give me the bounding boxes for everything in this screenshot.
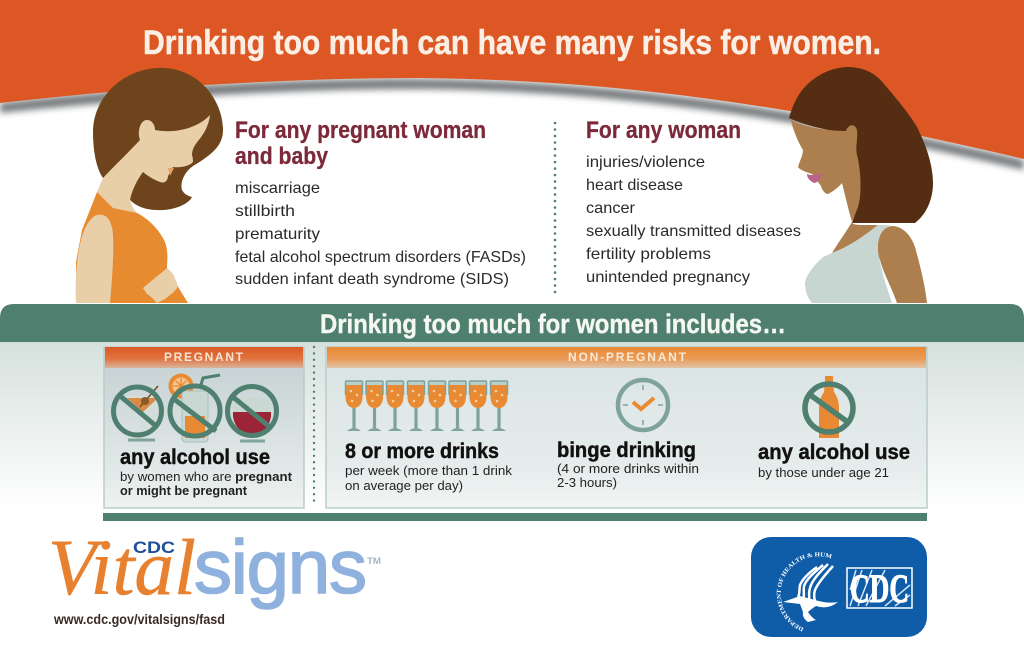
- CDC box: [847, 566, 912, 611]
- panel header: pregnant: PREGNANT: [164, 350, 244, 364]
- label: any alcohol use: by women who are pregnant: [120, 469, 293, 484]
- illustration: pregnant woman: [76, 68, 223, 303]
- label: 8 or more drinks: on average per day): [345, 478, 463, 493]
- label: binge drinking: [557, 438, 699, 490]
- heading: pregnant woman: For any pregnant woman: [235, 117, 486, 144]
- list: general risks: sexually transmitted diseases: [586, 223, 801, 240]
- panel header: pregnant: [105, 347, 303, 368]
- text block: pregnant woman risks: [235, 117, 526, 288]
- label: any alcohol use under 21: by those under age 21: [758, 465, 889, 480]
- label: 8 or more drinks: 8 or more drinks: [345, 439, 499, 463]
- icon: no martini: [114, 386, 163, 440]
- orange banner: [0, 0, 1024, 159]
- url: www.cdc.gov/vitalsigns/fasd: [53, 612, 225, 627]
- list: pregnancy risks: fetal alcohol spectrum disorders (FASDs): [235, 249, 526, 266]
- HHS seal: [776, 552, 838, 632]
- list: general risks: injuries/violence: [586, 154, 705, 171]
- heading: pregnant woman: [235, 117, 486, 170]
- list: pregnancy risks: stillbirth: [235, 203, 295, 220]
- page background gradient: [0, 342, 1024, 512]
- logo: CDC Vital Signs: CDC: [133, 538, 175, 557]
- logo: CDC Vital Signs: Vital: [48, 525, 196, 612]
- panel: non-pregnant: [326, 347, 927, 508]
- list: pregnancy risks: miscarriage: [235, 180, 320, 197]
- CDC box: CDC: [850, 566, 909, 611]
- label: binge drinking: 2-3 hours): [557, 475, 617, 490]
- label: any alcohol use under 21: [758, 440, 910, 480]
- label: any alcohol use: any alcohol use: [120, 445, 270, 469]
- green section band: [0, 304, 1024, 342]
- logo: CDC Vital Signs: signs: [194, 525, 367, 610]
- list: general risks: unintended pregnancy: [586, 269, 750, 286]
- text block: any woman risks: [586, 117, 801, 286]
- heading: pregnant woman: and baby: [235, 143, 328, 170]
- heading: any woman: For any woman: [586, 117, 741, 144]
- icon: eight glasses: [346, 381, 508, 431]
- list: general risks: cancer: [586, 200, 636, 217]
- icon: no wine: [228, 386, 276, 441]
- title: Drinking too much can have many risks for women.: [143, 24, 881, 62]
- panel header: non-pregnant: [327, 347, 926, 368]
- panel header: non-pregnant: NON-PREGNANT: [568, 350, 687, 364]
- icon: no mixed drink: [168, 374, 220, 442]
- list: pregnancy risks: prematurity: [235, 226, 320, 243]
- icon: clock: [618, 380, 668, 430]
- label: 8 or more drinks: per week (more than 1 drink: [345, 463, 513, 478]
- illustration: non-pregnant woman: [789, 67, 933, 303]
- list: pregnancy risks: [235, 180, 526, 288]
- label: any alcohol use under 21: any alcohol use: [758, 440, 910, 464]
- list: general risks: [586, 154, 801, 286]
- banner shadow: [0, 79, 1024, 170]
- list: general risks: fertility problems: [586, 246, 711, 263]
- label: binge drinking: (4 or more drinks within: [557, 461, 699, 476]
- icon: no bottle: [805, 376, 853, 438]
- list: general risks: heart disease: [586, 177, 683, 194]
- logo: CDC Vital Signs: TM: [367, 556, 381, 566]
- logo: CDC Vital Signs: [48, 525, 381, 612]
- label: 8 or more drinks: [345, 439, 513, 493]
- label: any alcohol use: or might be pregnant: [120, 483, 248, 498]
- HHS seal: DEPARTMENT OF HEALTH & HUMAN SERVICES·USA: [776, 552, 832, 632]
- panel: pregnant: [104, 347, 304, 508]
- label: binge drinking: binge drinking: [557, 438, 696, 462]
- band heading: Drinking too much for women includes…: [320, 309, 786, 339]
- label: any alcohol use: [120, 445, 293, 498]
- list: pregnancy risks: sudden infant death syndrome (SIDS): [235, 271, 509, 288]
